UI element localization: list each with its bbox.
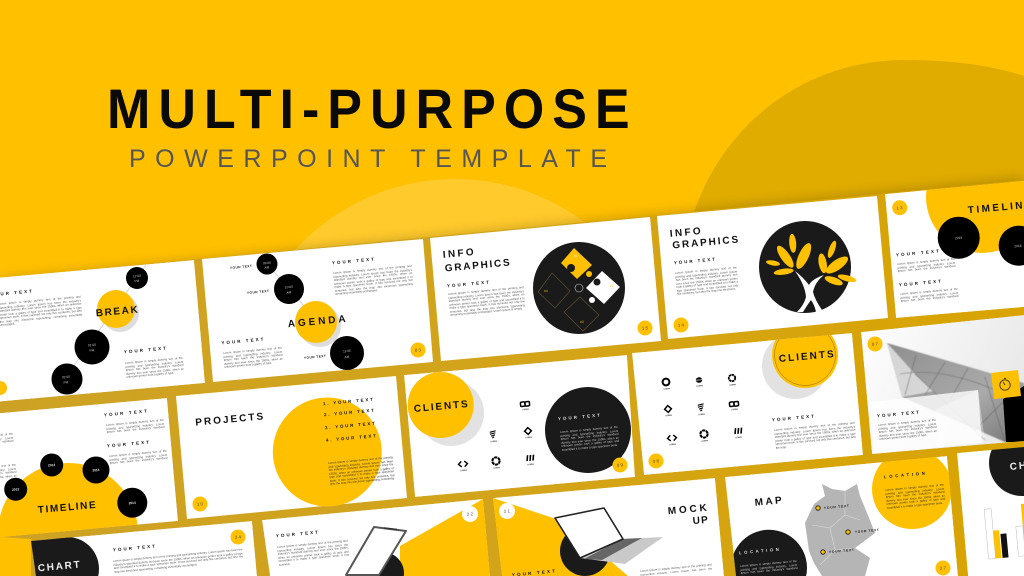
yellow circle with ring [772,322,838,388]
puzzle piece 03: 03 [580,320,584,324]
time circle 02:00: 02:00 [62,375,70,379]
page number 27: 2 7 [940,565,947,571]
logo grid: LOREM [527,464,534,466]
timeline title: TIMELINE [37,500,96,516]
chart title: CHART [37,560,80,574]
time circle 09:00: AM [264,265,270,270]
black circle with text [545,387,631,473]
black circle [989,430,1024,496]
list of items: 3. YOUR TEXT [325,421,375,430]
page number 03: 0 3 [415,347,422,353]
puzzle piece 04: 04 [544,289,548,293]
mock title: MOCK [667,503,708,517]
heading 1: YOUR TEXT [104,409,147,417]
slide: agenda [202,239,433,382]
page number 24: 2 4 [235,534,242,540]
heading bottom: YOUR TEXT [221,337,264,345]
agenda yellow circle [295,301,337,343]
heading top: YOUR TEXT [332,257,374,265]
heading info: INFO [442,247,474,261]
time circle 01:00: PM [89,348,95,353]
heading graphics: GRAPHICS [444,258,510,274]
page number 22 [462,506,478,522]
time circle 10:00 [274,274,304,304]
logo grid: LOREM [663,388,670,391]
year circle 2014 c: 2014 [128,501,136,505]
clock icon [575,284,583,292]
up title: UP [692,515,709,527]
year circle 2013 [4,478,27,501]
break circle shadow [104,298,139,332]
list of items: 2. YOUR TEXT [324,408,374,417]
page number 15 [638,320,652,336]
map marker 1: YOUR TEXT [824,504,849,510]
year circle 2014 b: 2014 [92,468,100,473]
page number 24 [230,530,246,544]
page number 09: 0 9 [617,462,624,468]
time circle 11:00 [330,336,364,370]
list of items: 4. YOUR TEXT [326,433,376,443]
your text heading: YOUR TEXT [674,257,715,265]
map title: MAP [754,495,783,509]
black circle [731,530,807,576]
time circle 11:00: AM [344,355,350,359]
logo grid: LOREM [729,384,736,387]
page number 14: 1 4 [678,322,685,328]
tree circle icon [759,221,857,313]
logo grid [662,374,743,446]
page number 27 [936,560,950,576]
heading: YOUR TEXT [772,414,814,422]
slide: photo 07 [861,315,1024,454]
black circle puzzle [533,242,625,334]
year circle 2019: 2019 [955,236,963,240]
logo grid: LOREM [731,409,738,411]
yellow circle [408,372,474,438]
agenda title: AGENDA [287,314,346,330]
time circle 02:00 [52,364,82,394]
year circle 2014 c [117,488,147,518]
time circle 12:00: PM [134,279,140,283]
location heading black: LOCATION [739,547,779,555]
slide: chart right [957,430,1024,576]
time circle 01:00: 01:00 [88,343,96,347]
slide: phone 22 [262,499,490,576]
page number 07 [868,336,882,352]
heading 2: YOUR TEXT [899,279,941,287]
year circle 2014 a: 2014 [48,463,56,468]
logo grid: LOREM [493,467,500,470]
year circle 2019 [938,217,980,259]
break yellow circle [97,290,135,328]
year circle 2014 a [40,454,63,476]
title: MULTI-PURPOSE [107,78,630,140]
logo grid: LOREM [698,414,705,416]
heading 1: YOUR TEXT [896,249,939,257]
time circle 09:00: 09:00 [263,261,271,265]
slide: projects [176,376,407,519]
subtitle: POWERPOINT TEMPLATE [129,145,607,173]
slide: clients 08 [632,322,863,475]
heading: YOUR TEXT [558,413,600,421]
yellow circle [872,449,952,529]
yellow shape [400,499,490,576]
black bar [1003,386,1024,442]
logo grid: LOREM [669,444,676,446]
page number 14 [674,318,688,332]
page number 08: 0 8 [653,458,660,464]
heading 2: YOUR TEXT [107,440,149,448]
page number 07: 0 7 [872,341,879,347]
time circle 10:00: 10:00 [285,285,293,289]
circle shadow [426,384,484,446]
yellow half circle [0,463,138,537]
circle shadow [762,333,828,399]
heading: YOUR TEXT [877,410,919,418]
time circle 12:00 [126,267,148,289]
yellow stopwatch tile [991,370,1021,399]
bar chart [984,503,1024,559]
background shape: lighter circle [239,179,671,395]
page number 13 [892,200,907,215]
slide: infographics puzzle [430,217,661,361]
shadow above slides [0,178,1024,300]
logo grid: LOREM [696,385,703,388]
year circle 2018: 2018 [1014,244,1022,248]
yellow shape [493,498,628,576]
slide: map 27 [725,449,958,576]
laptop mockup [555,508,663,564]
agenda circle shadow [299,305,341,347]
time circle 11:00: 11:00 [343,349,351,353]
year circle 2014 b [82,456,110,484]
slide: clients 09 [404,355,635,497]
black circle [560,526,610,576]
small label 1: YOUR TEXT [230,264,252,270]
page number 10 [192,496,208,512]
phone mockup [346,527,406,575]
map marker 2: YOUR TEXT [855,528,879,534]
page number 21 [499,503,515,519]
small label 2: YOUR TEXT [247,289,269,295]
yellow circle [273,398,382,506]
page number 08 [648,454,664,468]
slide: break [0,260,205,403]
time circle 09:00 [256,254,278,274]
logo grid: LOREM [525,437,532,439]
logo grid: LOREM [522,409,529,411]
page number 21: 2 1 [504,508,511,514]
page number [0,381,7,395]
page number 22: 2 2 [467,511,474,517]
small label 3: YOUR TEXT [304,354,326,360]
logo grid [458,401,535,472]
logo grid: LOREM [460,470,467,472]
translucent panels [870,390,985,454]
time circle 02:00: PM [63,380,69,385]
projects title: PROJECTS [195,411,264,429]
logo grid: LOREM [665,415,672,417]
slide: timeline left [0,398,178,537]
page number 03 [410,342,426,358]
time circle 12:00: 12:00 [133,274,141,278]
yellow circle [926,181,1024,253]
heading right: YOUR TEXT [124,346,166,354]
puzzle piece 01: 01 [574,254,578,258]
page number 09 [612,458,628,472]
background shape: darker arc [690,60,1024,300]
page number 15: 1 5 [642,325,649,331]
page number 10: 1 0 [197,501,204,507]
your text heading: YOUR TEXT [447,280,489,288]
page number 13: 1 3 [896,205,903,211]
building photo [887,343,1024,442]
break title: BREAK [95,305,139,319]
slide: mock up 21 [493,478,724,576]
heading: YOUR TEXT [113,544,155,552]
bright yellow corner at lower left [0,537,31,576]
heading graphics: GRAPHICS [672,235,739,251]
clients title: CLIENTS [778,349,834,365]
clients title: CLIENTS [413,399,468,415]
logo grid: LOREM [701,440,708,443]
puzzle piece 02: 02 [610,284,614,288]
black shape [28,535,99,576]
year circle 2013: 2013 [12,487,20,492]
heading: YOUR TEXT [276,530,318,538]
black circle [362,552,404,576]
logo grid: LOREM [735,437,742,439]
year circle 2018 [999,226,1024,266]
slide: chart 24 [28,521,257,576]
list of items [323,397,376,443]
location heading yellow: LOCATION [884,471,925,479]
slide: infographics tree [657,196,888,339]
germany map [805,484,875,576]
map marker 3: YOUR TEXT [829,548,854,554]
time circle 10:00: AM [286,290,292,295]
logo grid: LOREM [490,441,497,443]
slide: timeline top right [885,181,1024,318]
time circle 01:00 [74,330,110,364]
gold band behind slides [0,180,1024,576]
heading info: INFO [669,226,701,240]
list of items: 1. YOUR TEXT [323,397,373,406]
